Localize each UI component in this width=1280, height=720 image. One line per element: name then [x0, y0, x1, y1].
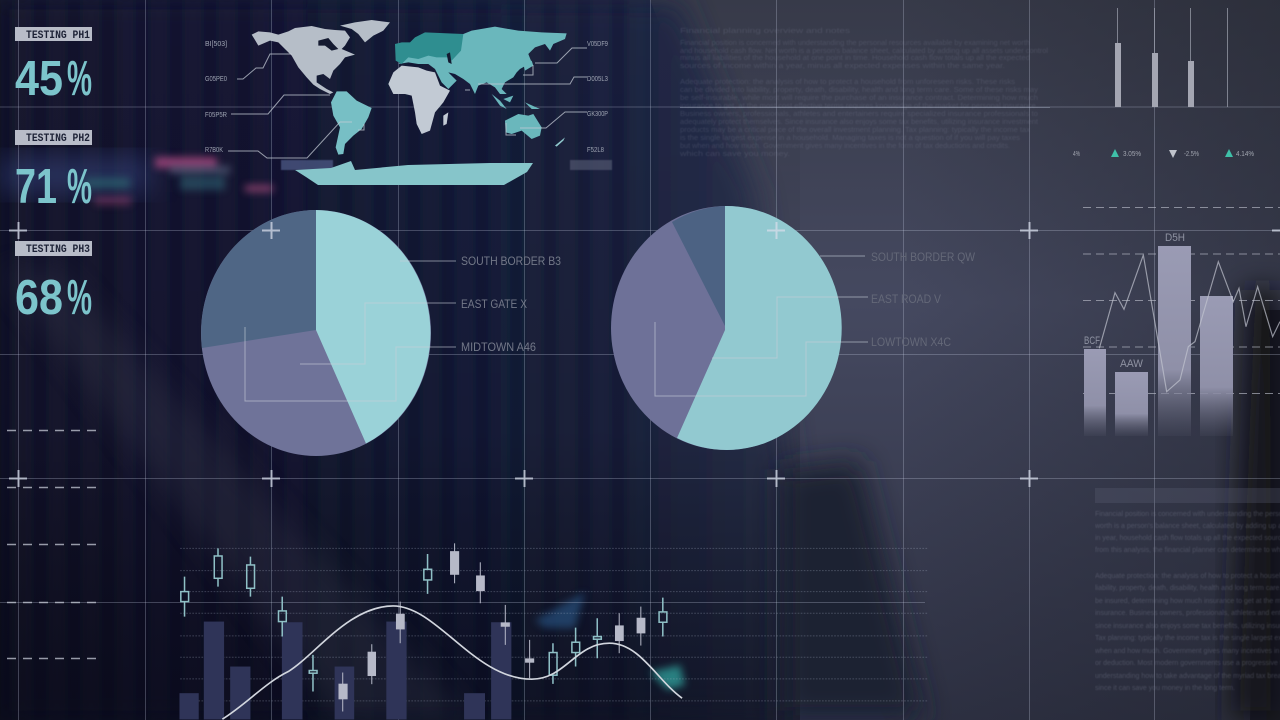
label: testing ph3: TESTING PH3	[26, 244, 90, 256]
top paragraph: adequately protect themselves. Since insurance also enjoys some tax benefits, utilizing insurance investment	[680, 119, 1038, 126]
map labels: G05PE0	[205, 76, 227, 83]
europe	[395, 32, 463, 64]
bars	[179, 622, 511, 719]
value: 68%: %	[67, 271, 92, 325]
map labels	[205, 41, 608, 154]
pie 2 labels: SOUTH BORDER QW	[871, 250, 976, 264]
bottom-right paragraph: since it can save you money in the long term.	[1095, 685, 1235, 692]
southeast asia islands	[492, 94, 507, 109]
pie chart 1	[201, 210, 431, 456]
left dashed ticks	[7, 430, 97, 658]
pie 1 labels: SOUTH BORDER B3	[461, 254, 561, 268]
top paragraph: Financial position is concerned with understanding the personal resources available by examining net worth	[680, 40, 1030, 47]
icon: down triangle	[1169, 150, 1177, 158]
value: 45%: 45	[15, 52, 63, 106]
top paragraph: which can save you money.	[679, 151, 790, 158]
pie 2 labels: LOWTOWN X4C	[871, 335, 951, 349]
candlestick chart	[179, 543, 927, 719]
trend curve	[222, 606, 682, 719]
asia	[398, 27, 567, 94]
top paragraph: insurance to get, at the most cost effective terms requires knowledge of the market for personal insurance.	[680, 103, 1038, 110]
pie 1 labels: EAST GATE X	[461, 297, 527, 311]
caspian sea	[447, 52, 452, 64]
top paragraph: products may be a critical piece of the overall investment planning. Tax planning: typically the income tax	[680, 127, 1031, 134]
madagascar	[443, 112, 448, 126]
map labels: R7B0K	[205, 147, 223, 154]
pie 1 labels: MIDTOWN A46	[461, 340, 536, 354]
top paragraph	[679, 28, 1048, 158]
bars	[1084, 349, 1106, 436]
top paragraph: Adequate protection: the analysis of how to protect a household from unforeseen risks. These risks	[680, 79, 1016, 86]
australia	[505, 114, 542, 139]
chart gridlines	[180, 548, 927, 701]
top paragraph: but when and how much. Government gives many incentives in the form of tax deductions and credits.	[680, 143, 1010, 150]
label: testing ph1: TESTING PH1	[26, 30, 90, 42]
north america	[252, 26, 355, 94]
hollow candles	[181, 548, 667, 692]
top-right stats: 4%	[1073, 151, 1080, 158]
top paragraph: is the single largest expense in a household. Managing taxes is not a question of if you will pay taxes	[680, 135, 1021, 142]
hudson bay	[318, 38, 338, 51]
right bar chart: AAW	[1120, 358, 1144, 370]
top paragraph: minus all liabilities of the household at one point in time. Household cash flow totals up all the expected	[680, 55, 1030, 62]
top paragraph: sources of income within a year, minus all expected expenses within the same year.	[680, 63, 1005, 70]
map labels: D005L3	[587, 76, 608, 83]
label: testing ph3	[15, 241, 92, 256]
map labels: GK300P	[587, 111, 608, 118]
value: 45%: %	[67, 52, 92, 106]
value: 71%: 71	[15, 160, 57, 214]
africa	[388, 66, 450, 134]
value: 68%: 68	[15, 271, 63, 325]
icon: up triangle	[1111, 149, 1119, 157]
map labels: BI[503]	[205, 41, 227, 48]
pie chart 2	[611, 206, 842, 450]
pie 2 leader lines	[655, 256, 868, 396]
map labels: F05P5R	[205, 112, 227, 119]
filled candles	[339, 543, 645, 711]
top paragraph: and household cash flow. Net worth is a person's balance sheet, calculated by adding up all assets under control	[680, 48, 1048, 55]
label: testing ph2	[15, 130, 92, 145]
map labels: V05DF9	[587, 41, 608, 48]
top-right stats	[1073, 149, 1254, 158]
label: testing ph2: TESTING PH2	[26, 133, 90, 145]
top-right stats: -2.5%	[1184, 151, 1199, 158]
top-right stats: 3.05%	[1123, 151, 1141, 158]
top-right candle bars	[1115, 8, 1228, 107]
map labels: F52L8	[587, 147, 604, 154]
pie 2 labels	[871, 250, 976, 349]
world map	[252, 20, 567, 185]
new zealand	[555, 137, 565, 147]
value: 71%: %	[67, 160, 92, 214]
top paragraph: Business owners, professionals, athletes and entertainers require specialized insurance professionals to	[680, 111, 1038, 118]
right bar chart: D5H	[1165, 232, 1185, 244]
bottom-right paragraph	[1094, 488, 1280, 692]
pie 1 labels	[461, 254, 561, 354]
label: testing ph1	[15, 27, 92, 42]
greenland	[340, 20, 390, 42]
bright line across paragraph	[680, 106, 1050, 108]
panel: testing percentages	[15, 27, 92, 325]
crosshairs	[9, 222, 1280, 487]
zigzag line	[1099, 255, 1280, 392]
top paragraph: be self-insurable, while most will require the purchase of an insurance contract. Determining how much	[680, 95, 1038, 102]
icon: up triangle	[1225, 149, 1233, 157]
dashed levels	[1083, 208, 1280, 394]
map leader lines	[228, 48, 587, 158]
top paragraph: can be divided into liability, property, death, disability, health and long term care. Some of these risks may	[680, 87, 1039, 94]
right bar chart	[1083, 208, 1280, 436]
antarctica	[295, 161, 533, 185]
lens glow streaks	[0, 157, 685, 690]
south america	[331, 91, 372, 155]
dashed vertical marker	[774, 198, 778, 660]
japan	[523, 61, 533, 71]
bar labels: BCF	[1084, 335, 1100, 347]
pie 2 labels: EAST ROAD V	[871, 292, 941, 306]
pie 1 leader lines	[245, 261, 456, 401]
top paragraph: Financial planning overview and notes	[680, 28, 851, 35]
top-right stats: 4.14%	[1236, 151, 1254, 158]
